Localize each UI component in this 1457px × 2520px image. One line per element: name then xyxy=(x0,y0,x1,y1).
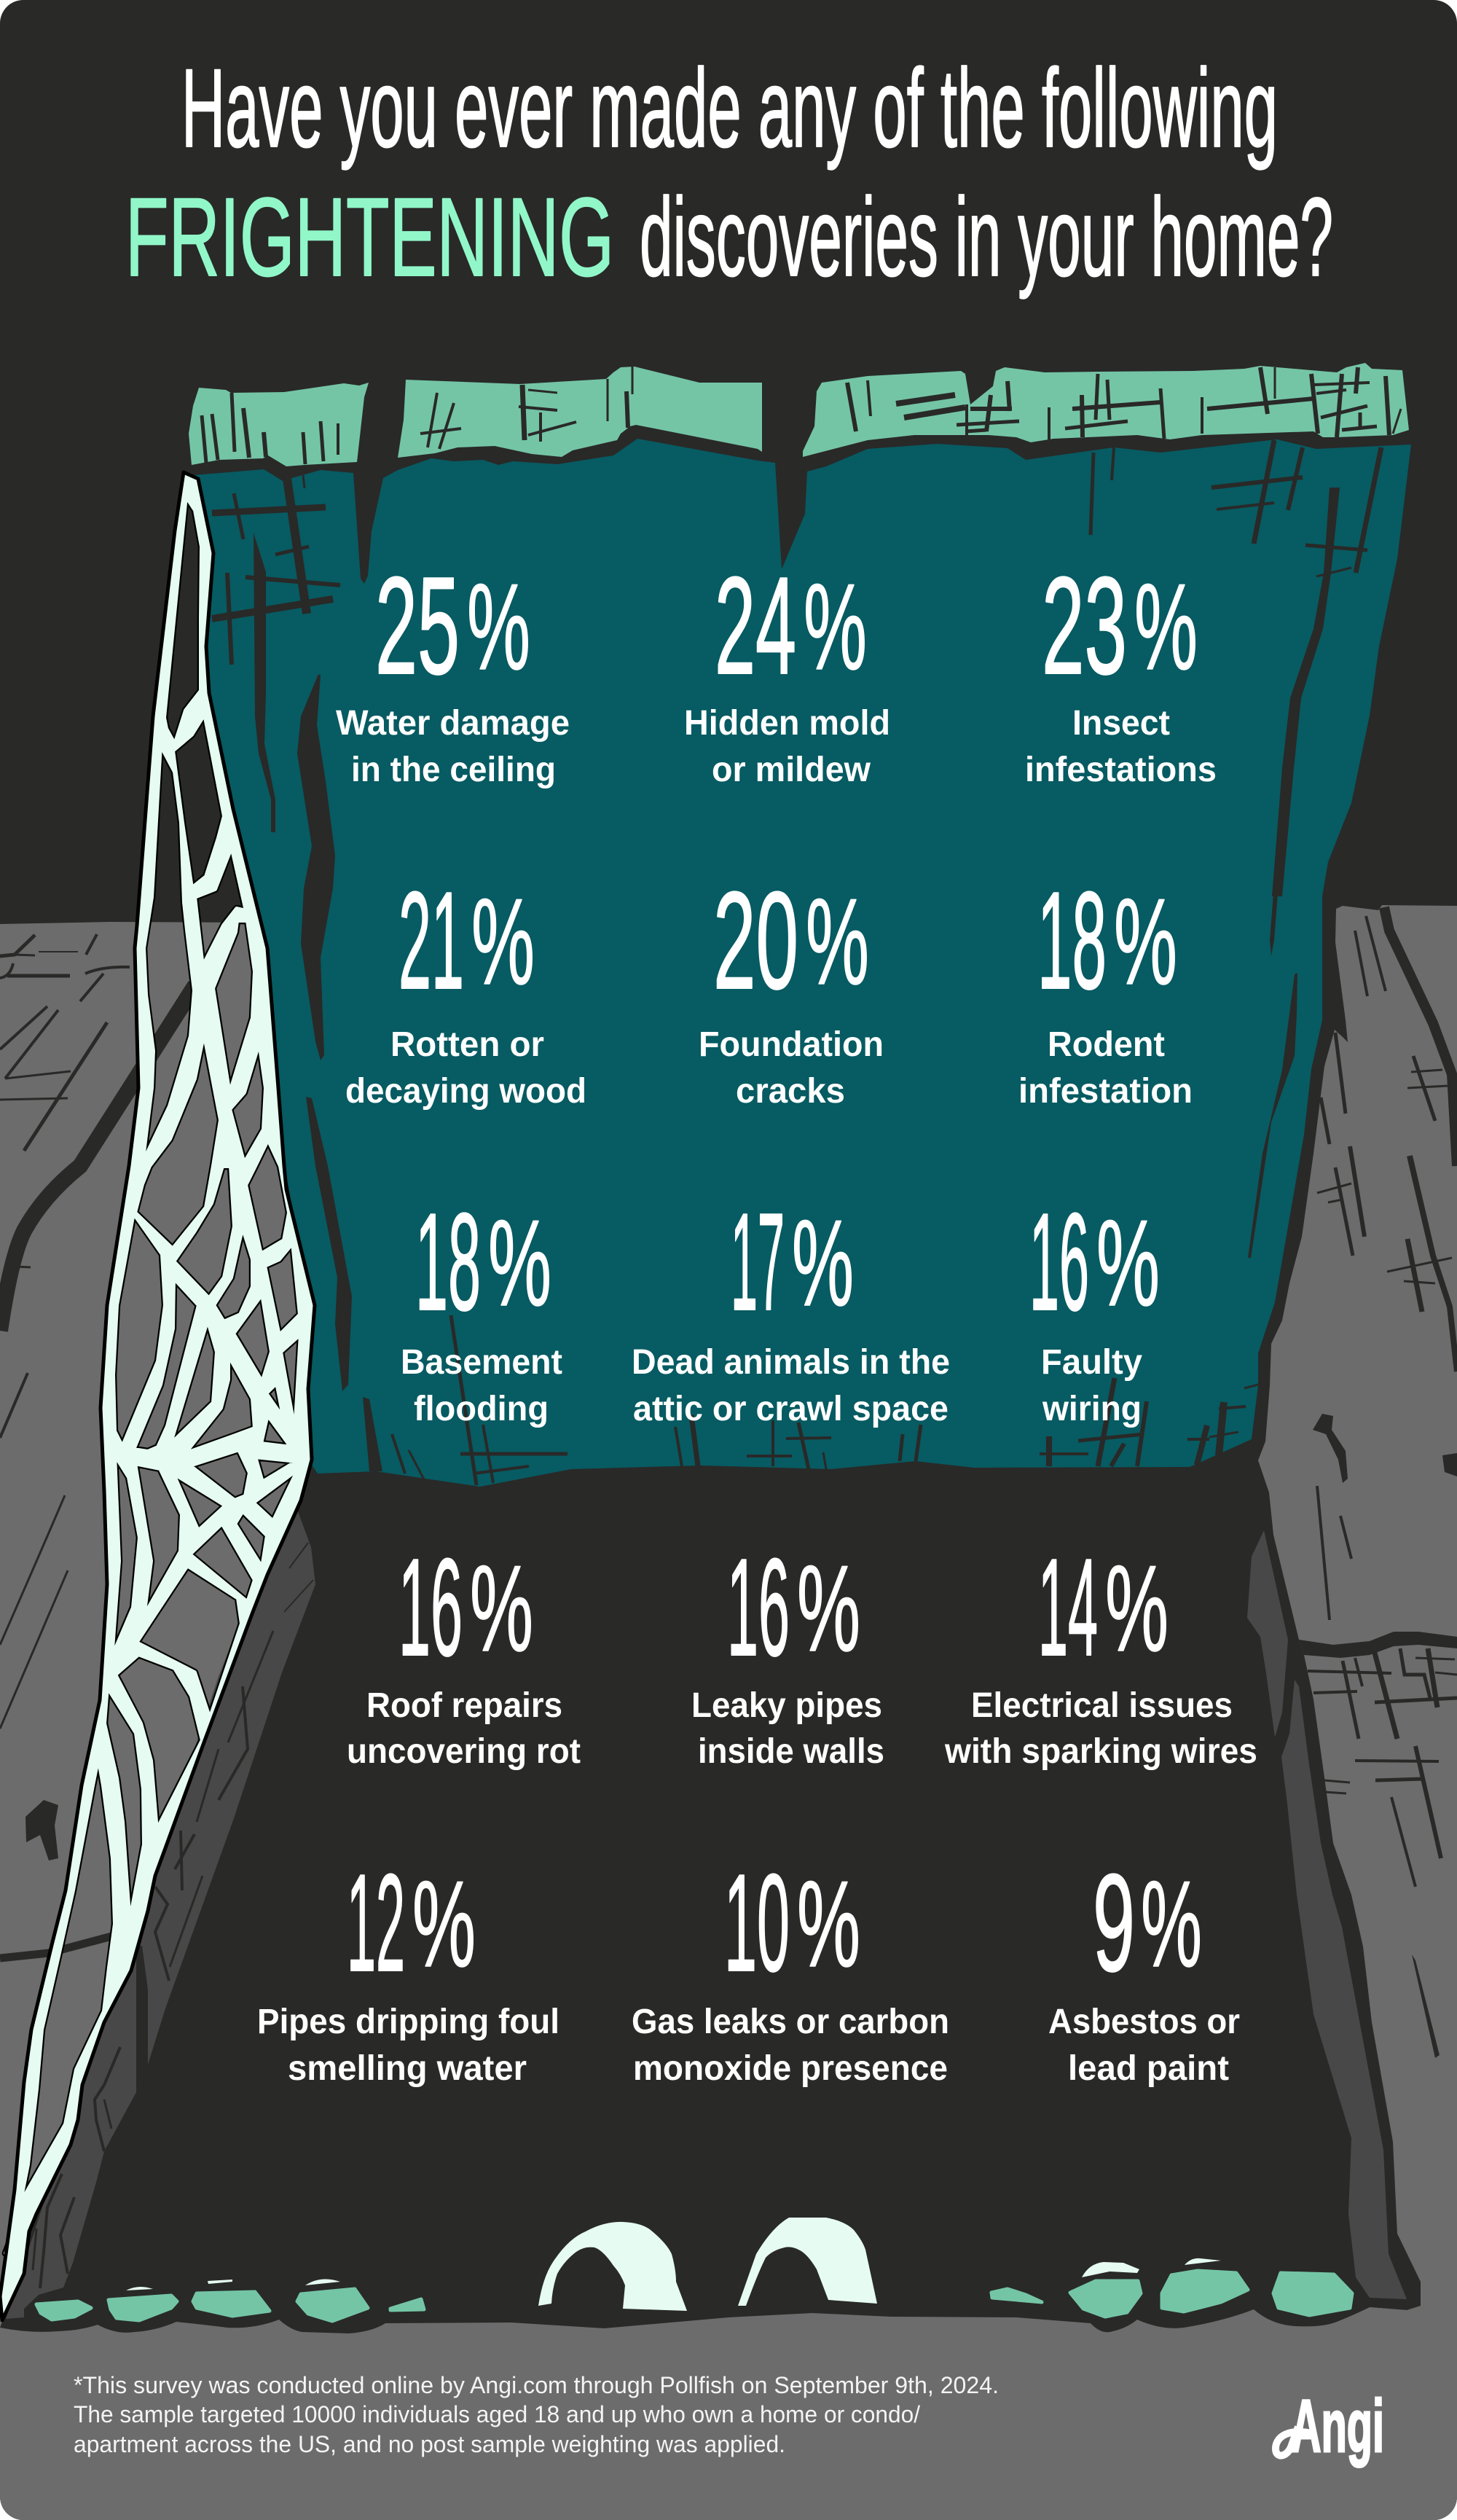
stat: 12% pipes dripping: Pipes dripping foul xyxy=(257,2003,559,2041)
toes and stones xyxy=(36,2271,1352,2321)
stat: 24% hidden mold or mildew: % xyxy=(804,558,867,695)
stat: 23% insect infestations xyxy=(1027,576,1215,781)
stat: 18% basement flooding: 18 xyxy=(415,1185,481,1339)
footnote: The sample targeted 10000 individuals aged 18 and up who own a home or condo/ xyxy=(74,2401,920,2427)
curtain panel xyxy=(194,439,1411,1487)
footnote: *This survey was conducted online by Angi.com through Pollfish on September 9th, 2024. xyxy=(74,2372,999,2398)
stat: 24% hidden mold or mildew: 24 xyxy=(715,549,796,703)
stat: 20% foundation cracks: cracks xyxy=(736,1072,845,1111)
stat: 9% asbestos or lead paint: % xyxy=(1141,1855,1202,1992)
stat: 18% rodent infestation: infestation xyxy=(1018,1072,1193,1111)
stat: 24% hidden mold or mildew: or mildew xyxy=(712,751,871,789)
right wall crack marks xyxy=(1299,907,1457,2058)
right wall xyxy=(1247,905,1457,2520)
toenail highlights xyxy=(126,2258,1221,2290)
stat: 9% asbestos or lead paint xyxy=(1049,1873,1240,2087)
title xyxy=(125,46,1333,300)
stat: 16% faulty wiring: 16 xyxy=(1029,1185,1089,1339)
stat: 25% water damage in the ceiling xyxy=(336,576,568,789)
stat: 25% water damage in the ceiling: % xyxy=(467,558,530,695)
stat: 16% roof repairs uncovering rot: Roof repairs xyxy=(366,1686,562,1725)
eye arch right xyxy=(738,2218,877,2306)
left wall shadow strip xyxy=(6,1494,315,2319)
stat: 16% faulty wiring: % xyxy=(1096,1194,1160,1331)
stat: 12% pipes dripping xyxy=(259,1873,557,2087)
stat: 16% leaky pipes inside walls: Leaky pipes xyxy=(691,1686,882,1725)
stat: 18% basement flooding: Basement xyxy=(401,1343,562,1382)
stat: 25% water damage in the ceiling: 25 xyxy=(375,549,460,703)
stat: 18% rodent infestation: 18 xyxy=(1037,864,1107,1018)
stat: 21% rotten or decaying wood: % xyxy=(471,873,535,1010)
stat: 21% rotten or decaying wood: decaying wood xyxy=(345,1072,586,1111)
stat: 16% leaky pipes inside walls: inside walls xyxy=(698,1732,884,1771)
stat: 18% rodent infestation: Rodent xyxy=(1048,1025,1165,1064)
stat: 23% insect infestations: infestations xyxy=(1025,751,1217,789)
eye arch left xyxy=(538,2222,687,2311)
stat: 10% gas leaks: Gas leaks or carbon xyxy=(632,2003,949,2041)
stat: 17% dead animals: Dead animals in the xyxy=(632,1343,950,1382)
stat: 24% hidden mold or mildew xyxy=(686,576,888,781)
stat: 14% electrical issues: % xyxy=(1105,1540,1169,1677)
stat: 17% dead animals: % xyxy=(792,1194,854,1331)
stat: 14% electrical issues: with sparking wires xyxy=(944,1732,1257,1771)
stat: 16% roof repairs uncovering rot: % xyxy=(470,1540,533,1677)
stat: 23% insect infestations: Insect xyxy=(1072,704,1170,743)
logo: Angi: Angi xyxy=(1291,2384,1384,2468)
stat: 14% electrical issues xyxy=(944,1559,1256,1770)
stat: 18% basement flooding: % xyxy=(488,1194,551,1331)
stat: 20% foundation cracks: Foundation xyxy=(699,1025,884,1064)
stat: 12% pipes dripping: smelling water xyxy=(288,2049,527,2088)
stat: 16% leaky pipes inside walls: 16 xyxy=(727,1530,790,1685)
logo: Angi xyxy=(1272,2396,1382,2468)
stat: 16% roof repairs uncovering rot xyxy=(348,1557,580,1770)
footnote xyxy=(74,2372,999,2457)
stat: 18% rodent infestation xyxy=(1021,891,1190,1103)
stat: 25% water damage in the ceiling: Water damage xyxy=(336,704,570,743)
stat: 12% pipes dripping: % xyxy=(412,1855,476,1992)
stat: 21% rotten or decaying wood xyxy=(347,891,584,1110)
stat: 18% rodent infestation: % xyxy=(1114,873,1177,1010)
stat: 9% asbestos or lead paint: 9 xyxy=(1093,1846,1135,2000)
stat: 12% pipes dripping: 12 xyxy=(347,1846,405,2000)
stat: 10% gas leaks xyxy=(632,1873,947,2087)
stat: 16% faulty wiring xyxy=(1033,1212,1158,1428)
stat: 17% dead animals xyxy=(634,1213,949,1428)
stat: 16% faulty wiring: Faulty xyxy=(1041,1343,1142,1382)
stat: 20% foundation cracks xyxy=(701,891,881,1103)
stat: 14% electrical issues: Electrical issues xyxy=(971,1686,1233,1725)
right wall shadow strips xyxy=(1247,1530,1407,2299)
stat: 16% leaky pipes inside walls: % xyxy=(797,1540,860,1677)
stat: 21% rotten or decaying wood: Rotten or xyxy=(390,1025,544,1064)
stat: 9% asbestos or lead paint: Asbestos or xyxy=(1048,2003,1240,2041)
stat: 18% basement flooding xyxy=(403,1212,562,1428)
stat: 25% water damage in the ceiling: in the ceiling xyxy=(351,751,556,789)
stat: 23% insect infestations: % xyxy=(1134,558,1198,695)
stat: 18% basement flooding: flooding xyxy=(414,1390,549,1428)
footnote: apartment across the US, and no post sample weighting was applied. xyxy=(74,2431,785,2457)
stat: 10% gas leaks: monoxide presence xyxy=(633,2049,948,2088)
stat: 23% insect infestations: 23 xyxy=(1042,549,1127,703)
left wall xyxy=(0,922,315,2328)
stat: 16% roof repairs uncovering rot: uncovering rot xyxy=(347,1732,581,1771)
stat: 10% gas leaks: 10 xyxy=(724,1846,790,2000)
stat: 10% gas leaks: % xyxy=(797,1855,860,1992)
title: FRIGHTENING xyxy=(125,175,614,300)
stat: 21% rotten or decaying wood: 21 xyxy=(398,864,464,1018)
curtain fold lines xyxy=(212,440,1381,1485)
stat: 14% electrical issues: 14 xyxy=(1038,1530,1098,1685)
stat: 16% faulty wiring: wiring xyxy=(1042,1390,1142,1428)
cobweb xyxy=(0,472,315,2320)
stat: 20% foundation cracks: % xyxy=(806,873,869,1010)
stat: 20% foundation cracks: 20 xyxy=(713,864,798,1018)
floor xyxy=(0,2307,1457,2520)
stat: 16% roof repairs uncovering rot: 16 xyxy=(398,1530,463,1685)
stat: 17% dead animals: 17 xyxy=(731,1185,785,1339)
curtain valance xyxy=(189,363,1409,466)
stat: 24% hidden mold or mildew: Hidden mold xyxy=(684,704,890,743)
stat: 17% dead animals: attic or crawl space xyxy=(633,1390,949,1428)
stat: 16% leaky pipes inside walls xyxy=(694,1557,883,1764)
stat: 9% asbestos or lead paint: lead paint xyxy=(1068,2049,1229,2088)
